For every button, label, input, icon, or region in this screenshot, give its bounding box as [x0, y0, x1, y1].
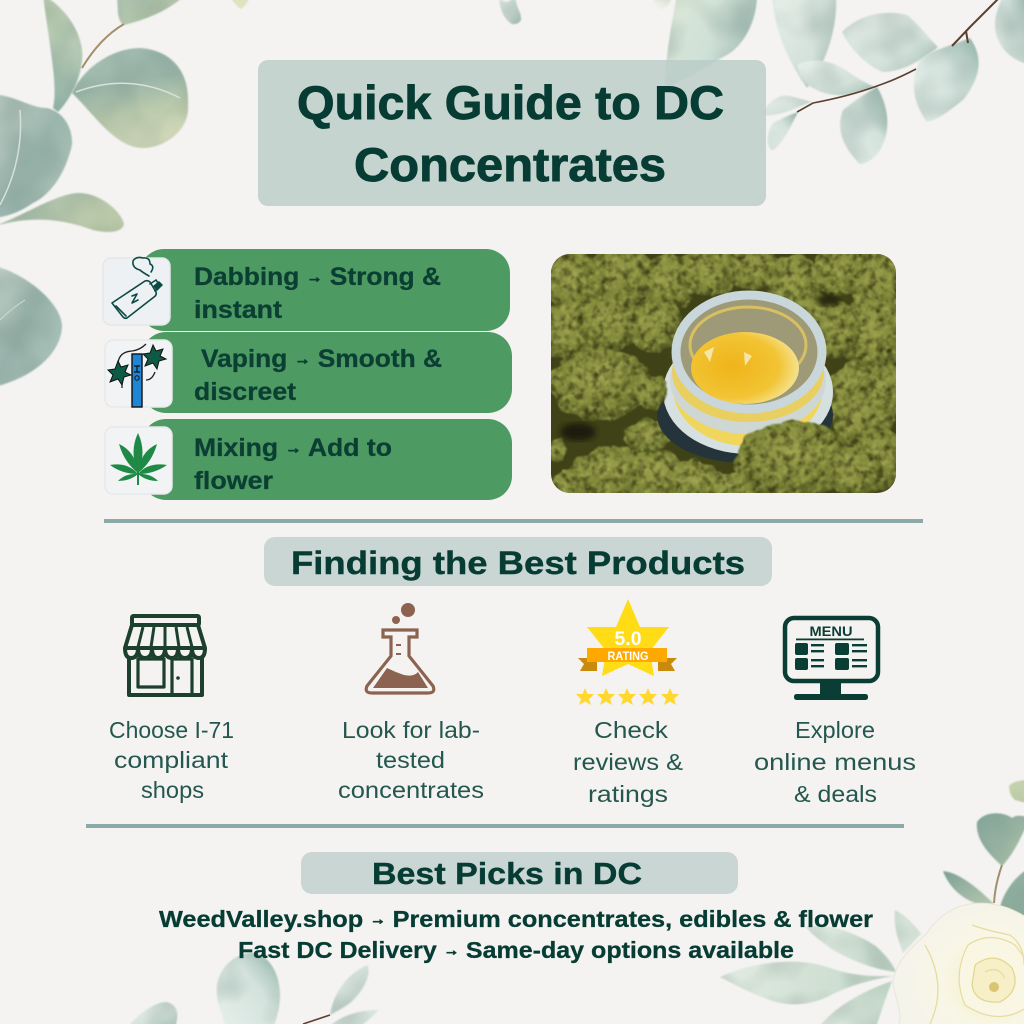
section heading: best picks in DC [301, 852, 738, 894]
item: lab-tested concentrates: tested [376, 747, 445, 773]
item: I-71 compliant shops: shops [141, 777, 204, 803]
title text [297, 76, 724, 191]
decorative leaves: top right [499, 0, 1024, 164]
title text: Quick Guide to DC [297, 76, 724, 129]
icon: cannabis leaf [105, 427, 172, 494]
item: reviews and ratings: ratings [588, 781, 668, 807]
glass jar [657, 295, 833, 463]
item: I-71 compliant shops: compliant [114, 747, 229, 773]
icon: 5.0 rating badge [578, 599, 677, 676]
decorative leaves: bottom right with rose [720, 780, 1024, 1024]
divider [86, 824, 904, 828]
method row: mixing [142, 419, 512, 500]
item: online menus and deals: online menus [754, 749, 916, 775]
method row: dabbing: Dabbing [194, 263, 294, 291]
item: online menus and deals: Explore [795, 717, 875, 743]
item: reviews and ratings [573, 599, 683, 807]
item: lab-tested concentrates [338, 603, 484, 803]
icon: storefront [125, 616, 205, 695]
best picks text: Premium concentrates, edibles & flower [386, 906, 873, 932]
concentrate jar photo [551, 254, 896, 493]
item: lab-tested concentrates: Look for lab- [342, 717, 480, 743]
method row: mixing: Add to [301, 434, 392, 462]
method row: dabbing: → [307, 269, 322, 286]
title text: Concentrates [354, 138, 666, 191]
decorative leaves: top left [0, 0, 250, 388]
icon: five stars [576, 688, 679, 705]
method row: mixing: → [286, 440, 301, 457]
item: reviews and ratings: Check [594, 717, 669, 743]
section heading: best picks in DC: Best Picks in DC [372, 856, 642, 891]
item: I-71 compliant shops [109, 616, 234, 803]
title panel [258, 60, 766, 206]
item: online menus and deals: & deals [794, 781, 877, 807]
method row: mixing: flower [194, 467, 273, 495]
item: reviews and ratings: reviews & [573, 749, 683, 775]
item: online menus and deals [754, 618, 916, 807]
best picks text [159, 906, 873, 963]
item: I-71 compliant shops: Choose I-71 [109, 717, 234, 743]
item: lab-tested concentrates: concentrates [338, 777, 484, 803]
method row: vaping: Vaping [201, 345, 283, 373]
section heading: finding the best products [264, 537, 772, 586]
icon: flask [366, 603, 434, 693]
icon: 5.0 rating badge: RATING [608, 651, 649, 663]
divider [104, 519, 923, 523]
icon: 5.0 rating badge: 5.0 [614, 629, 642, 650]
method row: vaping [142, 332, 512, 413]
icon: menu monitor: MENU [810, 624, 852, 639]
best picks text: → [444, 942, 459, 958]
best picks text: Same-day options available [459, 937, 794, 963]
method row: vaping: → [295, 351, 310, 368]
method row: dabbing [140, 249, 510, 331]
method row: vaping: Smooth & [310, 345, 442, 373]
icon: vape battery with smoke [103, 257, 170, 325]
best picks text: → [370, 911, 386, 927]
icon: vape pen with leaves [105, 340, 172, 407]
best picks text: WeedValley.shop [159, 906, 345, 932]
method row: vaping: discreet [194, 378, 297, 406]
icon: menu monitor [785, 618, 878, 700]
foreground buds [548, 348, 882, 504]
best picks text: Fast DC Delivery [238, 937, 421, 963]
method row: dabbing: instant [194, 296, 283, 324]
method row: mixing: Mixing [194, 434, 273, 462]
section heading: finding the best products: Finding the Best Products [291, 545, 745, 581]
decorative leaves: bottom left [125, 953, 378, 1024]
method row: dabbing: Strong & [322, 263, 441, 291]
